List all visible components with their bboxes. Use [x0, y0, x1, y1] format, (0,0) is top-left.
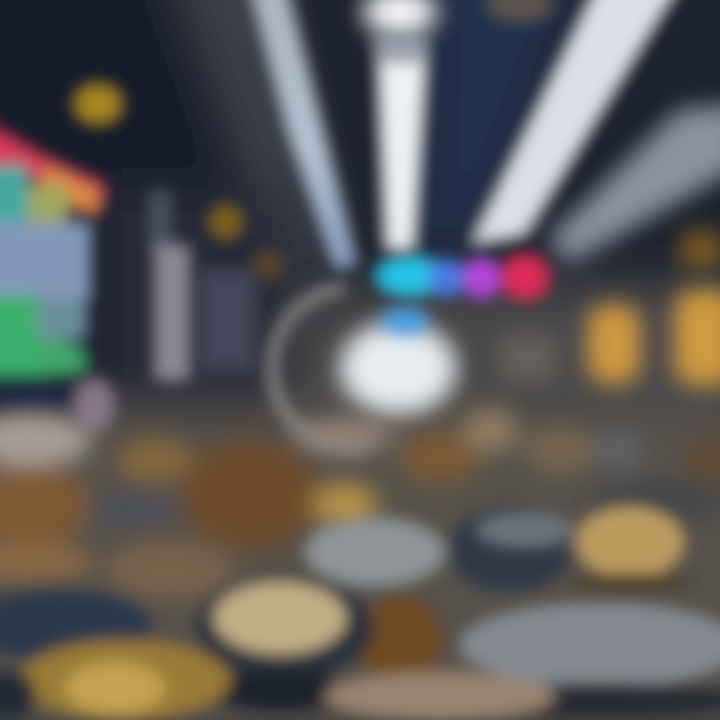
- coloured glow band: [376, 255, 549, 299]
- rainbow panel: [0, 120, 115, 431]
- light: center streak: [378, 60, 426, 250]
- golden windows at right: [500, 232, 720, 385]
- light: center streak bridge: [374, 36, 428, 62]
- light: center streak top: [364, 0, 436, 36]
- warm ceiling lamps: [74, 0, 554, 278]
- ceiling light streaks: [248, 0, 720, 268]
- light: left streak: [248, 0, 356, 268]
- pale column: [150, 190, 255, 380]
- glass ring and white glow: [272, 288, 456, 448]
- coins, front row: [0, 506, 720, 720]
- coins and table, mid row: [0, 408, 720, 600]
- light: far right streak: [548, 105, 720, 262]
- light: right streak: [470, 0, 682, 245]
